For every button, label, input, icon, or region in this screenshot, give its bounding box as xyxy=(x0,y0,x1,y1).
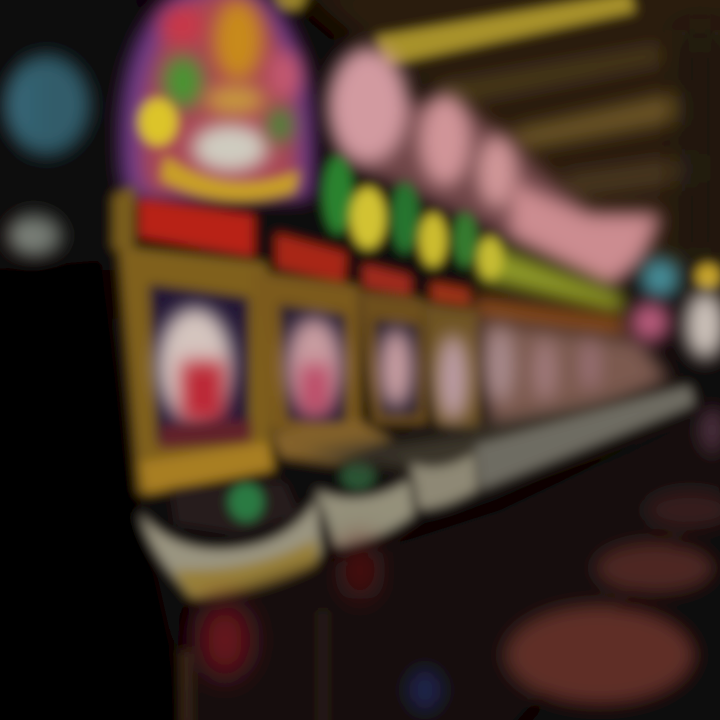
foreground black silhouette xyxy=(0,262,190,720)
pink upper row xyxy=(328,47,660,285)
lower machine bases xyxy=(180,400,720,720)
machine 1 cabinet xyxy=(112,185,275,495)
green and yellow row xyxy=(322,155,625,315)
machine 2 cabinet xyxy=(252,270,395,465)
machine 4 cabinet xyxy=(422,302,480,430)
red header row xyxy=(138,198,625,338)
button decks xyxy=(138,385,695,598)
machine 3 cabinet xyxy=(358,290,428,425)
machine 1 topper xyxy=(120,0,314,201)
far machine screens xyxy=(478,318,670,430)
stools xyxy=(505,406,720,705)
upper-left blue light and white lamp xyxy=(0,0,120,270)
ceiling with gold beams xyxy=(270,0,720,300)
right edge lights xyxy=(630,258,720,359)
